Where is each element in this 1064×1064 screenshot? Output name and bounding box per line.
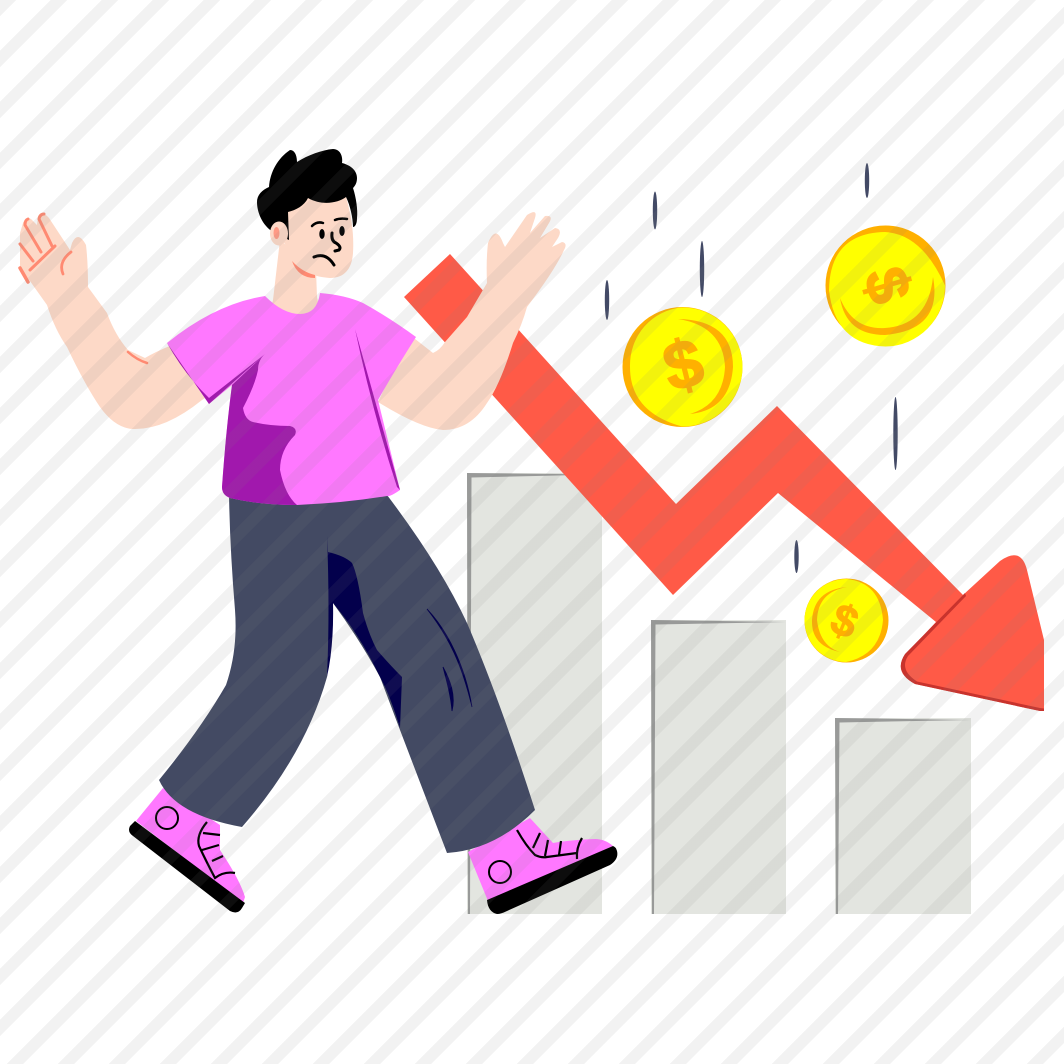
trouser creases [427, 609, 472, 711]
arrowhead dark edge [901, 593, 1044, 711]
right arm and hand [378, 212, 566, 430]
bar chart [467, 473, 971, 914]
coin: upper right: $ [851, 260, 924, 310]
trouser shadow [327, 536, 402, 728]
coin: left: $ [656, 324, 711, 406]
shirt shadow panel [222, 354, 297, 505]
bar: medium [651, 620, 786, 914]
hair [257, 149, 357, 240]
right shoe [468, 818, 617, 914]
trousers [159, 495, 535, 853]
t-shirt [167, 293, 416, 505]
falling motion streaks [605, 163, 898, 573]
coin: small: $ [824, 594, 865, 649]
mouth [314, 256, 334, 265]
bar: tall [467, 473, 602, 914]
coin: small [804, 578, 888, 662]
bar: short [835, 718, 971, 914]
coin: upper right [826, 226, 946, 346]
sleeve hem shadow [167, 343, 265, 404]
falling red arrow [404, 254, 1044, 711]
shirt side fold [355, 329, 400, 490]
left arm and hand [20, 214, 225, 429]
neck and face [268, 197, 353, 322]
chin shadow [292, 261, 315, 278]
eyes and eyebrows [312, 219, 347, 239]
hand and elbow creases [20, 214, 147, 363]
left shoe [129, 788, 245, 912]
ear [270, 222, 288, 246]
man [20, 149, 617, 914]
coin: left [622, 307, 742, 427]
nose [332, 233, 340, 251]
